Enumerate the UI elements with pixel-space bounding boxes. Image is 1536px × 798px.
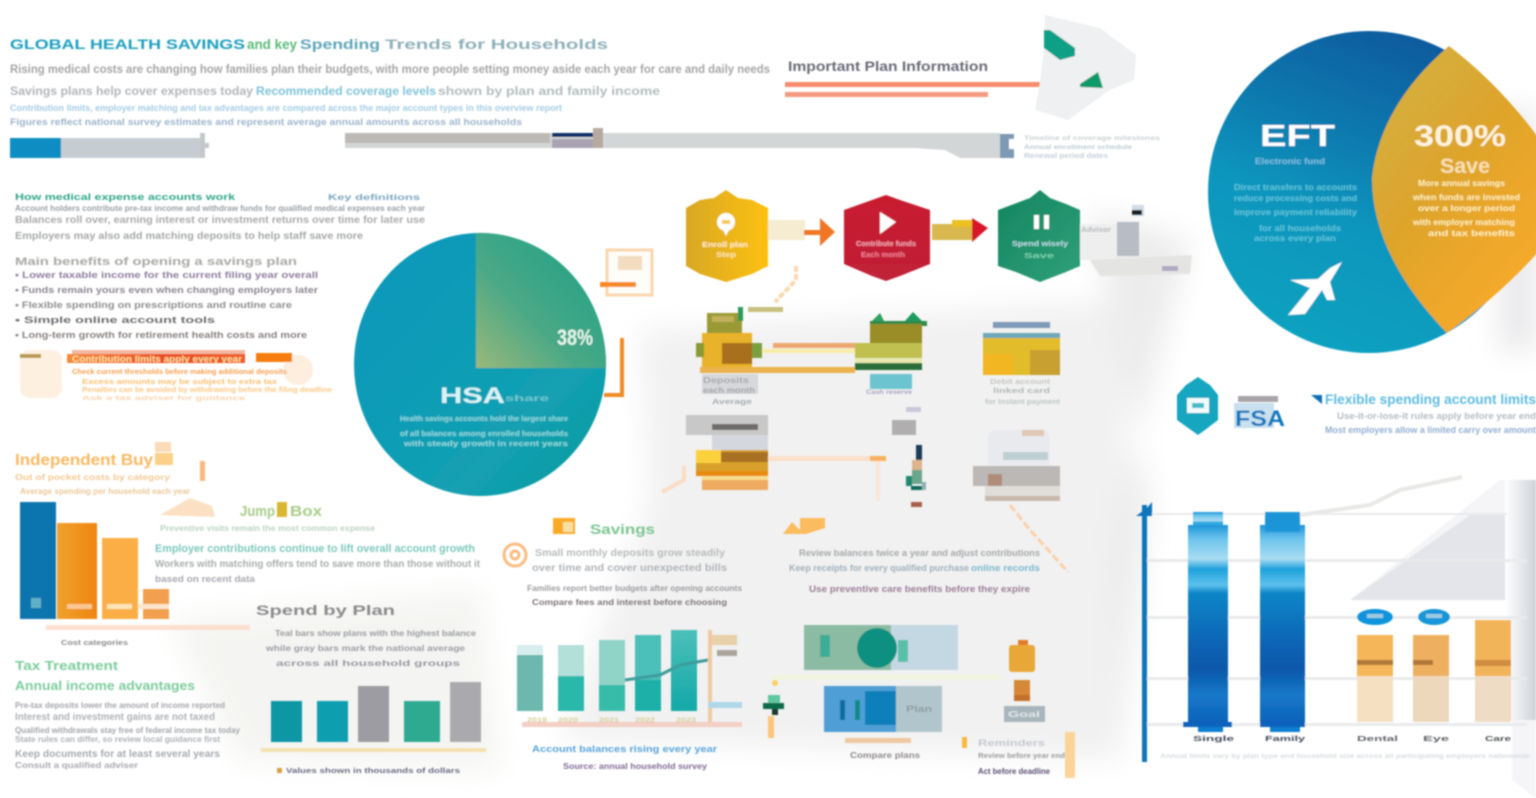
- segment: gold share: [1372, 46, 1536, 333]
- timeline bar: Annual enrollment schedule: [1024, 145, 1133, 151]
- x axis labels: Family: [1265, 736, 1305, 743]
- body: Pre-tax deposits lower the amount of income reported: [15, 701, 225, 710]
- orange bars: [1357, 620, 1511, 722]
- callout: key insight: Important Plan Information: [788, 58, 988, 74]
- icon: trophy: Goal: [1008, 710, 1040, 719]
- caption: coins: each month: [703, 386, 755, 395]
- pie title: HSA: [440, 383, 505, 408]
- green sub-heading: Preventive visits remain the most common expense: [160, 524, 376, 533]
- caption: coins: [702, 374, 758, 406]
- bars: [517, 630, 697, 711]
- bracket connector: [604, 338, 622, 395]
- note: reminders: [962, 732, 1075, 778]
- caption: cards: [845, 738, 921, 760]
- axis labels: 2019: [527, 718, 548, 724]
- blue segment text: Direct transfers to accounts: [1234, 183, 1358, 192]
- text: Teal bars show plans with the highest balance: [275, 629, 477, 638]
- text lines: Families report better budgets after opening accounts: [527, 584, 743, 593]
- left text block: overview: Account holders contribute pre-tax income and withdraw funds for qualified medical expenses each year: [15, 204, 425, 213]
- heading: Spend by Plan: [256, 602, 395, 618]
- trend line: [625, 660, 708, 680]
- blue segment text: EFT: [1260, 118, 1335, 153]
- left bar chart: Cost categories: [61, 640, 128, 647]
- left text block: overview: How medical expense accounts work: [15, 192, 236, 202]
- left text block: overview: Balances roll over, earning interest or investment returns over time for later use: [15, 215, 425, 226]
- process step: green hexagon: Save: [1024, 253, 1054, 260]
- icon: pin: [717, 213, 735, 231]
- caption: coins: Average: [712, 399, 752, 406]
- note: reminders: Review before year end: [978, 753, 1065, 760]
- FSA section header: [1177, 377, 1536, 435]
- process step: yellow hexagon: [686, 190, 768, 282]
- heading and text: Flexible spending account limits: [1325, 391, 1536, 407]
- body: Qualified withdrawals stay free of federal income tax today: [15, 726, 241, 735]
- intro text: [10, 62, 770, 127]
- pie text lines: Health savings accounts hold the largest share: [400, 416, 568, 423]
- icon: white airplane: [1288, 262, 1342, 315]
- heading: [553, 518, 655, 537]
- icon: clipboard device: [973, 430, 1060, 501]
- bottom right bar chart: [1136, 477, 1536, 798]
- heading and text: [1311, 391, 1536, 435]
- green sub-heading: Jump: [240, 503, 275, 520]
- green sub-heading: Box: [290, 503, 323, 520]
- gold segment text: and tax benefits: [1428, 229, 1516, 238]
- callout: key insight: [785, 58, 1040, 97]
- axis labels: [527, 718, 697, 724]
- value pills: [1357, 609, 1450, 625]
- blue segment text: for all households: [1259, 224, 1342, 233]
- heading: Tax Treatment: [15, 658, 119, 673]
- heading and text: Use-it-or-lose-it rules apply before year end: [1337, 411, 1536, 421]
- body: State rules can differ, so review local guidance first: [15, 735, 220, 744]
- x axis labels: Single: [1193, 736, 1234, 743]
- process step: red hexagon: Contribute funds: [856, 241, 916, 248]
- teal note: Employer contributions continue to lift overall account growth: [155, 543, 475, 555]
- dashed connector: device to tips: [1010, 505, 1068, 572]
- icon: gold card right: linked card: [993, 388, 1050, 395]
- y axis: [1136, 502, 1152, 762]
- text: while gray bars mark the national average: [265, 644, 466, 653]
- timeline bar: [345, 128, 1161, 160]
- left chart heading: Out of pocket costs by category: [15, 473, 171, 482]
- axis labels: 2021: [599, 718, 620, 724]
- badge: FSA: FSA: [1235, 406, 1285, 431]
- timeline bar: Renewal period dates: [1024, 153, 1108, 160]
- left list: benefits: • Lower taxable income for the current filing year overall: [15, 270, 318, 280]
- progress bar: [10, 133, 209, 158]
- intro text: Figures reflect national survey estimates and represent average annual amounts across all households: [10, 117, 522, 127]
- gold segment text: with employer matching: [1412, 218, 1515, 227]
- tips text block: [783, 518, 1040, 594]
- teal bar chart: Source: annual household survey: [563, 762, 708, 771]
- icon: gold card right: Debit account: [990, 379, 1051, 386]
- process step: yellow hexagon: Step: [716, 252, 736, 259]
- blue segment text: Electronic fund: [1255, 157, 1325, 166]
- card: blue: Plan: [906, 704, 932, 714]
- heading: Savings: [590, 521, 655, 537]
- process step: red hexagon: [844, 195, 930, 281]
- x axis labels: Dental: [1357, 736, 1398, 743]
- callout icon: chat note: [600, 250, 652, 295]
- left list: benefits: [15, 256, 319, 340]
- process step: red hexagon: Each month: [861, 252, 905, 259]
- pie text lines: of all balances among enrolled households: [400, 431, 568, 438]
- icon: trophy: [1004, 640, 1045, 722]
- axis labels: 2022: [635, 718, 656, 724]
- left list: benefits: Main benefits of opening a savings plan: [15, 256, 297, 268]
- intro text: Rising medical costs are changing how families plan their budgets, with more people setting money aside each year for care and daily needs: [10, 62, 770, 76]
- intro text: Contribution limits, employer matching and tax advantages are compared across the major account types in this overview report: [10, 103, 562, 113]
- gold segment text: Save: [1440, 155, 1490, 178]
- baseline: [261, 748, 486, 752]
- card: green: [804, 625, 958, 670]
- divider line: cards: [772, 675, 1000, 680]
- connector lines: coins to stack: [700, 343, 855, 373]
- icon: money stack: Cash reserve: [866, 390, 913, 396]
- bars: [271, 682, 481, 742]
- left list: benefits: • Simple online account tools: [15, 315, 215, 325]
- callout: orange warning: Contribution limits apply every year: [72, 354, 243, 364]
- blue segment text: across every plan: [1254, 234, 1336, 243]
- icon: gold card stack: [686, 415, 768, 490]
- green sub-heading: [160, 502, 376, 533]
- process step: green hexagon: Spend wisely: [1012, 241, 1068, 248]
- title: Trends for Households: [385, 36, 608, 52]
- left text block: overview: [15, 192, 425, 242]
- x axis labels: [1193, 736, 1511, 743]
- left text block: overview: Employers may also add matching deposits to help staff save more: [15, 231, 363, 242]
- icon: gold card right: [983, 322, 1061, 406]
- callout: orange warning: Penalties can be avoided by withdrawing before the filing deadline: [82, 387, 332, 394]
- side legend: [708, 630, 742, 722]
- body: Keep documents for at least several years: [15, 749, 220, 760]
- heading and text: Most employers allow a limited carry over amount: [1325, 425, 1536, 435]
- teal note: [155, 543, 481, 584]
- process step: yellow hexagon: Enroll plan: [702, 242, 748, 249]
- teal note: based on recent data: [155, 574, 256, 584]
- badge: FSA: [1234, 396, 1285, 431]
- text lines: Review balances twice a year and adjust contributions: [799, 548, 1040, 558]
- callout: orange warning: Ask a tax adviser for guidance: [82, 396, 246, 402]
- gold segment text: over a longer period: [1418, 204, 1515, 213]
- text: [265, 629, 477, 668]
- note: reminders: Act before deadline: [978, 767, 1051, 776]
- segment label: 38%: [557, 325, 593, 350]
- caption: cards: Compare plans: [850, 751, 921, 760]
- arrow: yellow to red: [768, 218, 835, 246]
- heading: [15, 658, 195, 693]
- background wash: [170, 110, 1536, 770]
- text lines: Use preventive care benefits before they expire: [809, 584, 1030, 594]
- axis labels: 2020: [558, 718, 579, 724]
- text: across all household groups: [276, 659, 461, 668]
- icon: sun: [504, 544, 526, 566]
- caption: [277, 768, 282, 773]
- savings text block: [504, 518, 743, 607]
- text lines: [789, 548, 1040, 594]
- background arrow shape: [1300, 477, 1536, 798]
- teal pie chart: share: [505, 394, 550, 403]
- text lines: online records: [971, 563, 1040, 573]
- icon: play: [880, 212, 896, 234]
- figure: advisor: [1080, 205, 1192, 276]
- body: Interest and investment gains are not taxed: [15, 712, 215, 723]
- body: [15, 701, 241, 770]
- heading: Annual income advantages: [15, 678, 195, 693]
- left list: benefits: • Long-term growth for retirement health costs and more: [15, 330, 307, 340]
- left list: benefits: • Funds remain yours even when changing employers later: [15, 285, 319, 295]
- icon: money stack: [855, 312, 927, 396]
- icon: check: [1034, 215, 1039, 229]
- icon: green brush: [763, 680, 784, 738]
- icon: teal hexagon: [1177, 377, 1218, 435]
- left bar chart: [20, 502, 250, 647]
- figure: advisor: Advisor: [1081, 227, 1111, 234]
- heading: [783, 518, 825, 534]
- text lines: Keep receipts for every qualified purchase: [789, 563, 969, 573]
- pie text lines: with steady growth in recent years: [403, 441, 568, 448]
- x axis labels: Care: [1485, 736, 1511, 743]
- chart caption: Account balances rising every year: [532, 744, 718, 754]
- teal pie chart: [354, 233, 606, 496]
- title: [10, 36, 608, 52]
- intro text: Savings plans help cover expenses today: [10, 84, 253, 98]
- title: Spending: [300, 36, 380, 52]
- lower middle chart: Values shown in thousands of dollars: [286, 768, 460, 775]
- process step: green hexagon: [998, 190, 1080, 282]
- left list: benefits: • Flexible spending on prescriptions and routine care: [15, 300, 292, 310]
- left chart heading: Average spending per household each year: [20, 487, 190, 496]
- text lines: over time and cover unexpected bills: [532, 563, 727, 574]
- title: GLOBAL HEALTH SAVINGS: [10, 36, 245, 52]
- callout: orange warning: Excess amounts may be subject to extra tax: [82, 379, 277, 386]
- icon: gold card right: for instant payment: [985, 399, 1061, 406]
- grid lines: [1147, 513, 1527, 726]
- icon: coin purse: [696, 307, 783, 368]
- text lines: Small monthly deposits grow steadily: [535, 548, 725, 559]
- header: title and intro: [10, 36, 1161, 160]
- segment: green share: [476, 233, 606, 368]
- axis labels: 2023: [676, 718, 697, 724]
- text lines: Compare fees and interest before choosing: [532, 598, 727, 607]
- footnote: Annual limits vary by plan type and household size across all participating employers nationwide: [1160, 754, 1531, 760]
- gold segment text: 300%: [1414, 120, 1506, 153]
- icon: airplane top: [1035, 15, 1136, 120]
- arrow: red to green: [932, 218, 988, 242]
- dashed connector: step to coins: [775, 266, 796, 302]
- callout: orange warning: Check current thresholds before making additional deposits: [72, 369, 287, 376]
- left chart heading: Independent Buy: [15, 452, 153, 469]
- icon: small figure: [892, 407, 926, 507]
- title: and key: [247, 36, 297, 52]
- blue segment text: improve payment reliability: [1234, 208, 1358, 217]
- x axis labels: Eye: [1423, 736, 1449, 743]
- note: reminders: Reminders: [978, 738, 1045, 748]
- body: Consult a qualified adviser: [15, 761, 138, 770]
- card: blue: [824, 686, 942, 732]
- lower middle chart: [256, 602, 486, 775]
- teal bar chart: [517, 630, 742, 771]
- teal note: Workers with matching offers tend to save more than those without it: [155, 559, 481, 570]
- blue bars: [1183, 512, 1305, 732]
- left chart heading: [15, 442, 215, 517]
- gold segment text: More annual savings: [1418, 179, 1506, 188]
- gold segment text: [1412, 120, 1520, 238]
- lower left text block: [15, 658, 241, 770]
- intro text: Recommended coverage levels: [256, 84, 436, 98]
- text lines: [527, 548, 743, 607]
- callout: orange warning: [20, 350, 332, 402]
- left text block: overview: Key definitions: [328, 193, 421, 202]
- intro text: shown by plan and family income: [438, 84, 660, 98]
- right circle chart: [1208, 31, 1536, 353]
- timeline bar: Timeline of coverage milestones: [1024, 136, 1161, 142]
- gold segment text: when funds are invested: [1412, 193, 1520, 202]
- pie text lines: [400, 416, 568, 448]
- caption: coins: Deposits: [703, 376, 750, 385]
- connector: card to figure: [662, 456, 886, 501]
- blue segment text: [1234, 118, 1358, 243]
- blue segment text: reduce processing costs and: [1234, 194, 1357, 203]
